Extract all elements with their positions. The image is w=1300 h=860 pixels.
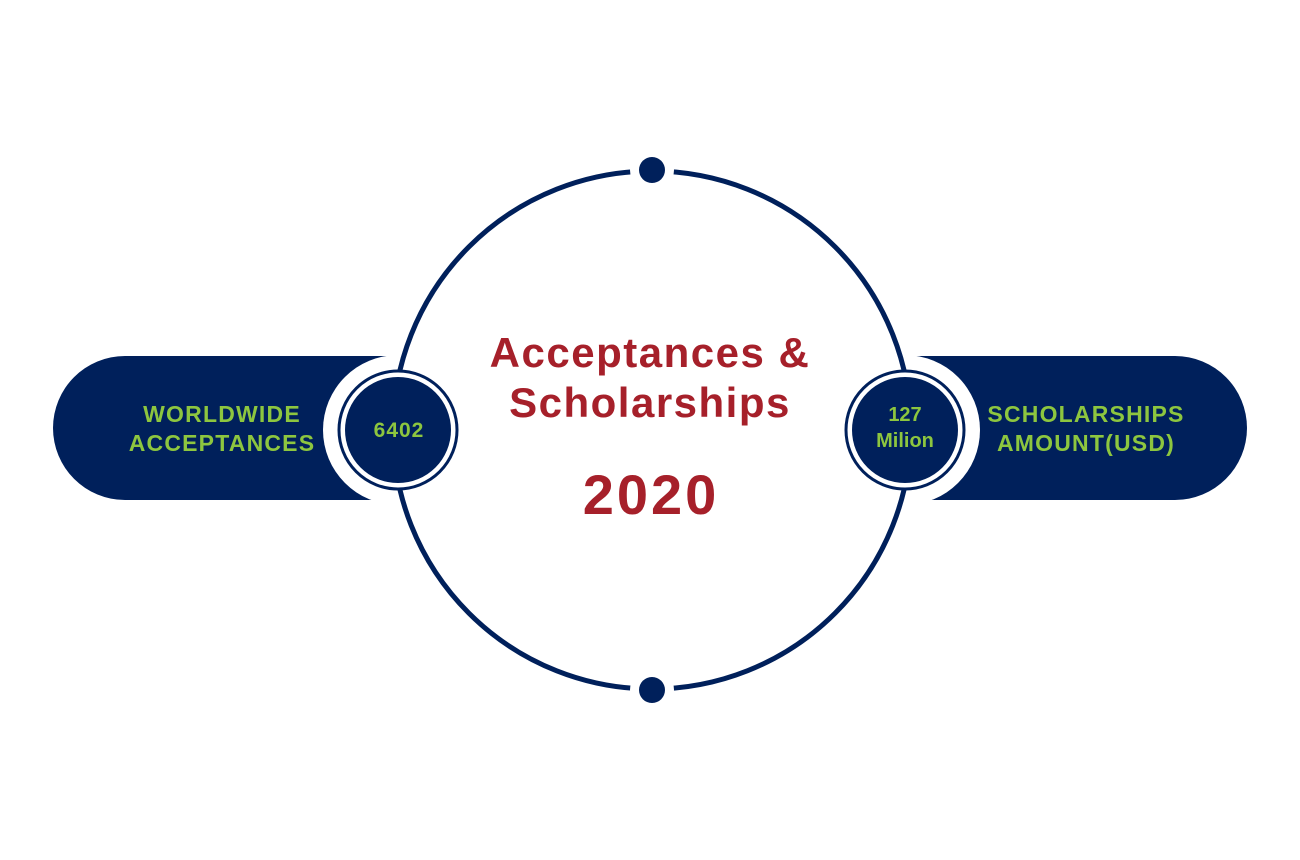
badge: 127 Milion <box>846 371 964 489</box>
panel: left pill <box>53 356 392 500</box>
big circle <box>393 148 911 712</box>
text: scholarships amount: AMOUNT(USD) <box>997 430 1175 456</box>
badge: 127 Milion: Milion <box>876 430 934 452</box>
icon: bottom dot <box>639 677 665 703</box>
text: scholarships amount: SCHOLARSHIPS <box>987 401 1185 427</box>
badge: 6402 <box>339 371 457 489</box>
text: worldwide acceptances: WORLDWIDE <box>143 401 301 427</box>
title: Acceptances & <box>490 329 810 376</box>
panel: right pill <box>910 356 1247 500</box>
badge: 6402: 6402 <box>374 419 424 442</box>
title: Scholarships <box>509 379 791 426</box>
badge: 127 Milion: 127 <box>888 404 922 426</box>
icon: top dot <box>639 157 665 183</box>
text: worldwide acceptances: ACCEPTANCES <box>129 430 315 456</box>
year: 2020 <box>583 463 719 526</box>
